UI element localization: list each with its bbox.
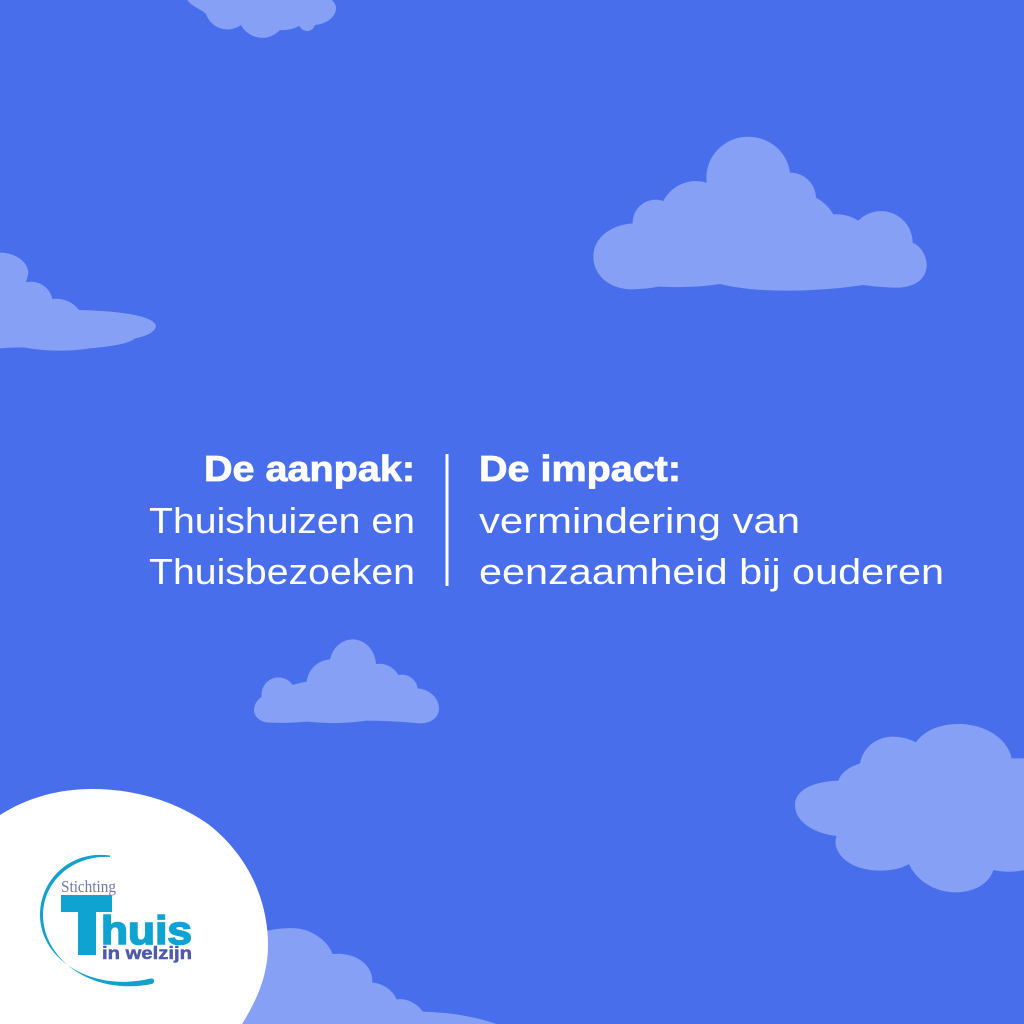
logo word: Thuis <box>61 879 192 973</box>
text block: De aanpak <box>149 448 415 592</box>
cloud: top right large <box>593 137 927 291</box>
logo arc <box>40 855 154 986</box>
heading: De impact: De impact: <box>479 448 681 489</box>
logo badge <box>0 789 268 1024</box>
logo word: Thuis: huis <box>101 909 192 953</box>
cloud: left edge <box>0 253 156 351</box>
line: vermindering van: vermindering van <box>479 500 800 541</box>
cloud: bottom centre behind logo badge <box>237 928 497 1024</box>
line: Thuishuizen en: Thuishuizen en <box>149 500 415 541</box>
cloud: top centre <box>187 0 336 38</box>
logo words: in welzijn: in welzijn <box>102 943 192 963</box>
text block: De impact <box>479 448 944 592</box>
cloud: bottom right <box>795 724 1024 892</box>
logo word: Thuis: T <box>61 879 112 973</box>
logo: Stichting Thuis in welzijn <box>40 855 192 986</box>
logo word: Stichting: Stichting <box>61 877 116 896</box>
cloud: centre small <box>254 639 439 723</box>
heading: De aanpak: De aanpak: <box>204 448 415 489</box>
divider <box>446 454 448 586</box>
line: eenzaamheid bij ouderen: eenzaamheid bij ouderen <box>479 551 944 592</box>
line: Thuisbezoeken: Thuisbezoeken <box>149 551 415 592</box>
